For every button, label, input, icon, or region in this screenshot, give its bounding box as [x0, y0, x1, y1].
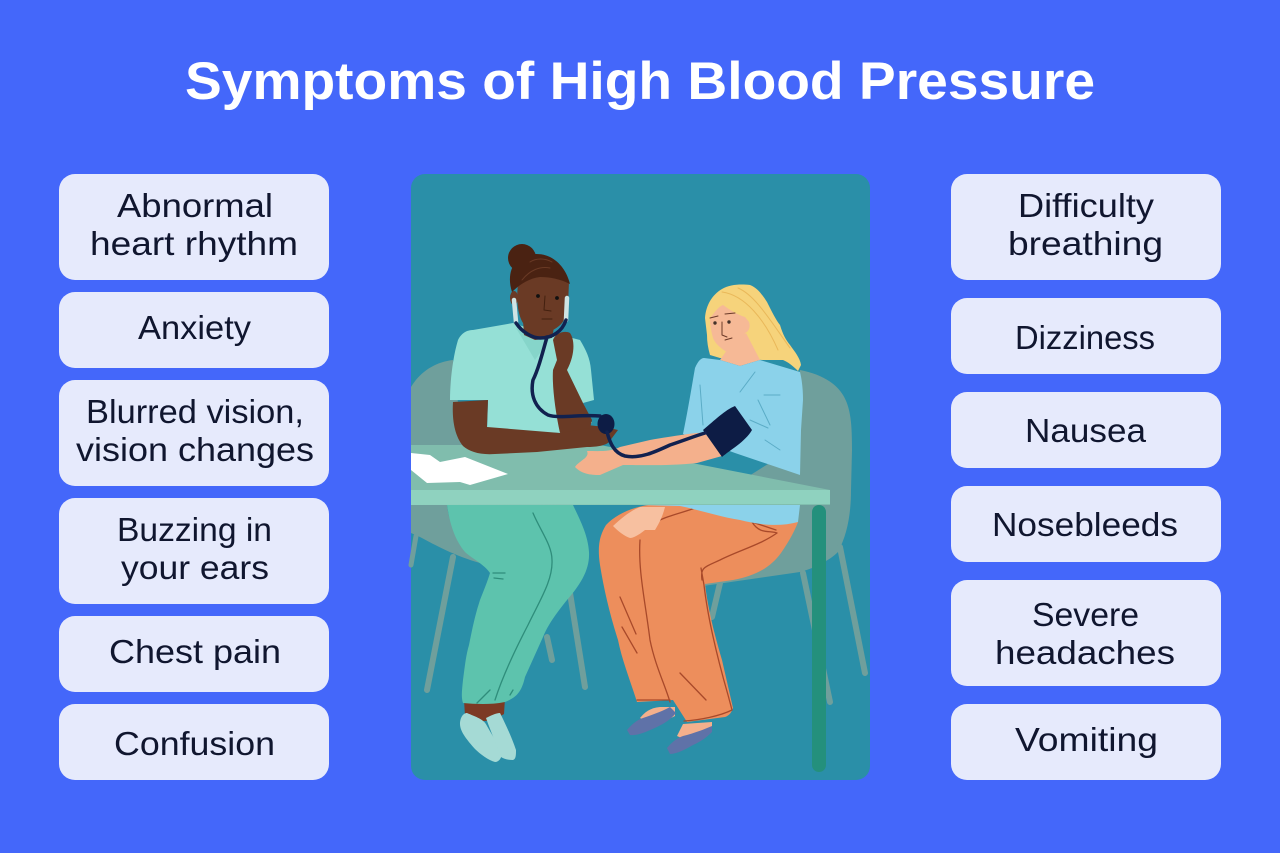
symptom: vomiting: Vomiting — [1015, 721, 1158, 758]
symptom: nausea: Nausea — [1025, 412, 1147, 449]
right arm — [553, 332, 592, 433]
papers — [411, 453, 508, 485]
symptom: abnormal heart rhythm: Abnormal — [117, 187, 273, 224]
symptom: buzzing in your ears: your ears — [121, 549, 269, 586]
hair — [705, 284, 801, 371]
patient lower body — [599, 503, 798, 754]
symptom: confusion — [59, 704, 329, 780]
symptom: chest pain: Chest pain — [109, 633, 281, 670]
panel: illustration of blood pressure check — [411, 174, 870, 780]
symptom: nosebleeds — [951, 486, 1221, 562]
symptom: severe headaches: Severe — [1032, 596, 1139, 633]
symptom: dizziness: Dizziness — [1015, 319, 1155, 356]
panel: left symptom list — [59, 174, 329, 780]
symptom: difficulty breathing — [951, 174, 1221, 280]
symptom: buzzing in your ears — [59, 498, 329, 604]
neck — [720, 333, 760, 366]
face — [517, 272, 569, 333]
nurse — [450, 244, 618, 454]
symptom: nosebleeds: Nosebleeds — [992, 506, 1178, 543]
symptom: anxiety: Anxiety — [138, 309, 252, 346]
panel: right symptom list — [951, 174, 1221, 780]
title: Symptoms of High Blood Pressure — [185, 52, 1095, 111]
stethoscope earpieces — [514, 298, 567, 322]
symptom: blurred vision — [59, 380, 329, 486]
sweater — [683, 358, 803, 475]
left chair — [411, 360, 585, 690]
symptom: blurred vision: vision changes — [76, 431, 314, 468]
symptom: confusion: Confusion — [114, 725, 275, 762]
face — [710, 305, 750, 352]
patient — [575, 284, 803, 475]
hair — [510, 254, 570, 292]
ear — [510, 291, 518, 305]
cuff tube — [607, 432, 705, 457]
neck — [523, 320, 555, 340]
patient hand on knee — [613, 507, 665, 538]
arm and hand — [575, 433, 722, 475]
symptom: severe headaches — [951, 580, 1221, 686]
symptom: abnormal heart rhythm: heart rhythm — [90, 225, 298, 262]
right chair — [703, 370, 865, 702]
symptom: difficulty breathing: breathing — [1008, 225, 1163, 262]
eyes and features — [536, 294, 540, 298]
symptom: dizziness — [951, 298, 1221, 374]
collar — [516, 328, 553, 360]
symptom: severe headaches: headaches — [995, 634, 1175, 671]
table — [411, 445, 830, 772]
symptom: buzzing in your ears: Buzzing in — [117, 511, 272, 548]
left arm — [453, 400, 618, 454]
symptom: anxiety — [59, 292, 329, 368]
nurse trousers and shoes — [447, 505, 589, 762]
stethoscope tube — [516, 320, 600, 417]
symptom: chest pain — [59, 616, 329, 692]
patient top, lower part — [640, 505, 800, 525]
symptom: blurred vision: Blurred vision, — [86, 393, 304, 430]
symptom: vomiting — [951, 704, 1221, 780]
torso — [450, 323, 594, 433]
symptom: abnormal heart rhythm — [59, 174, 329, 280]
symptom: nausea — [951, 392, 1221, 468]
symptom: difficulty breathing: Difficulty — [1018, 187, 1155, 224]
cuff — [703, 406, 752, 457]
